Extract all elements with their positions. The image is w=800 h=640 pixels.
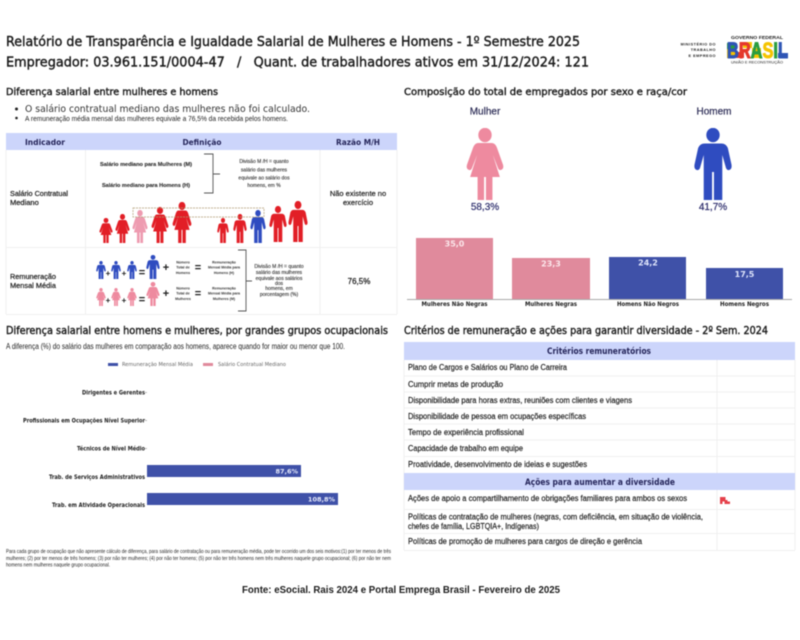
definition: division text: equivale ao salário dos — [238, 176, 290, 182]
header: criteria — [404, 342, 795, 360]
bar: Homens Nao Negros — [609, 257, 686, 308]
icons: women sum: + — [163, 288, 169, 300]
formula: women: Mulheres — [175, 297, 191, 301]
bar: Trab. em Atividade Operacionais — [147, 493, 338, 505]
action rows: chefes de família, LGBTQIA+, Indígenas) — [408, 522, 539, 531]
definition: division text: porcentagem (%) — [260, 292, 299, 298]
criteria rows: Tempo de experiência profissional — [408, 428, 524, 437]
value: not available — [330, 189, 386, 207]
formula: women: Mensal Média para — [208, 292, 241, 296]
action rows: Políticas de promoção de mulheres para cargos de direção e gerência — [408, 537, 643, 546]
definition: division text — [238, 159, 290, 189]
bracket — [204, 154, 220, 193]
employer subtitle: Empregador: 03.961.151/0004-47 / Quant. de trabalhadores ativos em 31/12/2024: 121 — [6, 56, 589, 70]
criteria rows: Proatividade, desenvolvimento de ideias e sugestões — [408, 460, 587, 469]
label: Mulher: Mulher — [470, 106, 501, 118]
icons: women sum: + — [122, 296, 127, 305]
icons: men sum: + — [106, 269, 111, 278]
icon: man — [694, 128, 732, 200]
icon: woman — [467, 128, 503, 200]
definition: division text — [254, 264, 304, 298]
ministry name: E EMPREGO — [688, 54, 716, 58]
table: criteria — [404, 342, 795, 550]
bar: Homens Negros: 17,5 — [735, 270, 755, 279]
row label: Remuneracao Mensal Media: Mensal Média — [10, 281, 57, 290]
table header: Razão M/H — [336, 138, 380, 147]
header: criteria: Critérios remuneratórios — [547, 346, 651, 357]
criteria rows: Plano de Cargos e Salários ou Plano de Carreira — [408, 363, 568, 372]
bar: Homens Negros: Homens Negros — [720, 302, 770, 308]
bar: Mulheres Nao Negras: Mulheres Não Negras — [422, 302, 488, 308]
value: not available: Não existente no — [330, 189, 386, 198]
heading: criteria: Critérios de remuneração e ações para garantir diversidade - 2º Sem. 2024 — [404, 325, 768, 337]
Governo Federal label: GOVERNO FEDERAL — [731, 35, 783, 40]
footnote — [6, 549, 391, 568]
table header: Definição — [182, 138, 222, 147]
formula: women: Remuneração — [212, 286, 237, 290]
heading: occupational groups: Diferença salarial entre homens e mulheres, por grandes grupos ocupacionais — [6, 325, 388, 337]
header: actions: Ações para aumentar a diversidade — [525, 478, 675, 488]
action rows: Políticas de contratação de mulheres (negras, com deficiência, em situação de violência, — [408, 512, 703, 522]
icons: men sum: = — [139, 267, 145, 279]
criteria rows: Disponibilidade para horas extras, reuniões com clientes e viagens — [408, 396, 632, 405]
footnote: homens nem mulheres naquele grupo ocupacional. — [6, 562, 110, 568]
bar: Trab. de Servicos Administrativos: 87,6% — [275, 468, 298, 476]
category labels: Técnicos de Nível Médio — [77, 446, 145, 452]
legend: Salário Contratual Mediano — [218, 361, 286, 368]
icons: women salaries line — [99, 202, 191, 243]
formula: women: Número — [176, 286, 191, 290]
icon: red marker — [720, 497, 730, 504]
row label: Salario Contratual Mediano — [10, 189, 68, 207]
bar: Trab. em Atividade Operacionais: 108,8% — [308, 496, 335, 504]
bar: Mulheres Negras: 23,3 — [541, 260, 561, 268]
row label: Salario Contratual Mediano: Salário Contratual — [10, 189, 68, 198]
icons: men sum: + — [122, 269, 127, 278]
category labels — [23, 390, 145, 509]
legend — [108, 361, 286, 368]
description: A diferença (%) do salário das mulheres em comparação aos homens, aparece quando for maior ou menor que 100. — [6, 342, 345, 351]
formula: men: Mensal Média para — [208, 266, 241, 270]
bar: Homens Nao Negros: 24,2 — [638, 258, 658, 268]
value: woman share: 58,3% — [471, 202, 499, 213]
icons: men sum — [96, 255, 169, 279]
formula: women: Mulheres (M) — [213, 297, 236, 301]
footnote: Para cada grupo de ocupação que não apresente cálculo de diferença, para salário de contratação ou para remuneração média, pode ter ocorrido um dos seis motivos:(1) por ter menos de três — [6, 549, 391, 555]
action rows — [408, 494, 703, 546]
logo: government — [681, 35, 788, 64]
formula: men: Homens — [176, 271, 190, 275]
category labels: Dirigentes e Gerentes — [82, 390, 145, 396]
value: man share: 41,7% — [699, 202, 727, 213]
footnote: mulheres; (2) por ter menos de três homens; (3) por não ter mulheres; (4) por não ter homens; (5) por não ter três homens nem três mulheres naquele grupo ocupacional; (6) por não ter nem — [6, 556, 391, 562]
header: actions — [404, 473, 795, 490]
bar: Mulheres Negras: Mulheres Negras — [525, 302, 578, 308]
definition: median salary labels: Salário mediano para Mulheres (M) — [100, 162, 192, 168]
icons: women sum: + — [106, 296, 111, 305]
heading: composition: Composição do total de empregados por sexo e raça/cor — [404, 87, 688, 98]
formula: men: Total de — [176, 266, 190, 270]
category labels: Trab. de Serviços Administrativos — [49, 475, 145, 481]
definition: division text: equivale aos salários — [256, 276, 303, 282]
criteria rows — [408, 363, 632, 469]
row label: Remuneracao Mensal Media: Remuneração — [10, 272, 56, 281]
definition: division text: homens, em % — [247, 183, 281, 189]
definition: division text: dos — [275, 281, 284, 287]
Brasil wordmark: BRASIL — [727, 38, 788, 63]
formula: men: = — [195, 262, 201, 274]
bracket — [238, 250, 252, 311]
definition: division text: Divisão M /H = quanto — [239, 159, 289, 165]
formula: men: Remuneração — [212, 260, 237, 264]
bar: Mulheres Nao Negras: 35,0 — [445, 240, 465, 248]
ministry name — [681, 42, 716, 58]
formula: men: Homens (H) — [214, 271, 235, 275]
criteria rows: Disponibilidade de pessoa em ocupações específicas — [408, 412, 586, 421]
heading: salary gap: Diferença salarial entre mulheres e homens — [6, 87, 218, 98]
bar chart: occupational groups — [23, 390, 338, 509]
formula: women: = — [195, 288, 201, 300]
panel: criteria and actions — [404, 325, 795, 550]
category labels: Trab. em Atividade Operacionais — [52, 503, 145, 509]
icons: men salaries line — [217, 201, 308, 243]
bar: Mulheres Negras — [512, 258, 590, 308]
bar: Trab. de Servicos Administrativos — [147, 465, 301, 477]
icons: women sum: = — [139, 294, 145, 306]
definition: median salary labels: Salário mediano para Homens (H) — [102, 183, 190, 189]
title: Relatório de Transparência e Igualdade Salarial de Mulheres e Homens - 1º Semestre 2025 — [6, 35, 580, 50]
definition: division text: salário das mulheres — [256, 270, 303, 276]
panel: composition — [404, 87, 792, 308]
bullet list: O salário contratual mediano das mulheres não foi calculado. — [25, 103, 310, 115]
icons: men sum: + — [163, 262, 169, 274]
source line: Fonte: eSocial. Rais 2024 e Portal Emprega Brasil - Fevereiro de 2025 — [242, 585, 560, 596]
formula: women — [175, 286, 241, 301]
definition: division text: salário das mulheres — [241, 168, 288, 174]
row label: Remuneracao Mensal Media — [10, 272, 57, 290]
formula: men: Número — [176, 260, 191, 264]
criteria rows: Capacidade de trabalho em equipe — [408, 444, 523, 453]
bar: Mulheres Nao Negras — [416, 238, 493, 308]
row label: Salario Contratual Mediano: Mediano — [10, 198, 39, 207]
legend: Remuneração Mensal Média — [122, 361, 193, 368]
formula: women: Total de — [176, 292, 190, 296]
bar: Homens Nao Negros: Homens Não Negros — [617, 302, 680, 308]
ministry name: TRABALHO — [691, 48, 716, 52]
criteria rows: Cumprir metas de produção — [408, 380, 504, 389]
table header — [6, 133, 397, 150]
formula: men — [176, 260, 241, 275]
bar chart: composition — [407, 238, 792, 308]
definition: median salary labels — [100, 162, 192, 189]
value: 76,5%: 76,5% — [348, 277, 370, 286]
icons: women sum — [96, 282, 169, 306]
label: Homem: Homem — [696, 106, 732, 118]
table header: Indicador — [25, 138, 65, 147]
ministry name: MINISTÉRIO DO — [681, 42, 716, 46]
panel: salary gap — [6, 87, 397, 314]
table: indicators — [6, 133, 397, 314]
bullet list: A remuneração média mensal das mulheres equivale a 76,5% da recebida pelos homens. — [25, 114, 288, 123]
bar: Homens Negros — [706, 268, 783, 308]
definition: division text: homens, em — [265, 286, 293, 292]
Uniao e Reconstrucao label: UNIÃO E RECONSTRUÇÃO — [731, 60, 783, 64]
value: not available: exercício — [343, 198, 373, 207]
bullet list — [15, 103, 310, 123]
category labels: Profissionais em Ocupações Nível Superior — [23, 418, 145, 424]
definition: division text: Divisão M /H = quanto — [254, 264, 304, 270]
panel: occupational groups — [6, 325, 391, 568]
action rows: Ações de apoio a compartilhamento de obrigações familiares para ambos os sexos — [408, 494, 687, 503]
